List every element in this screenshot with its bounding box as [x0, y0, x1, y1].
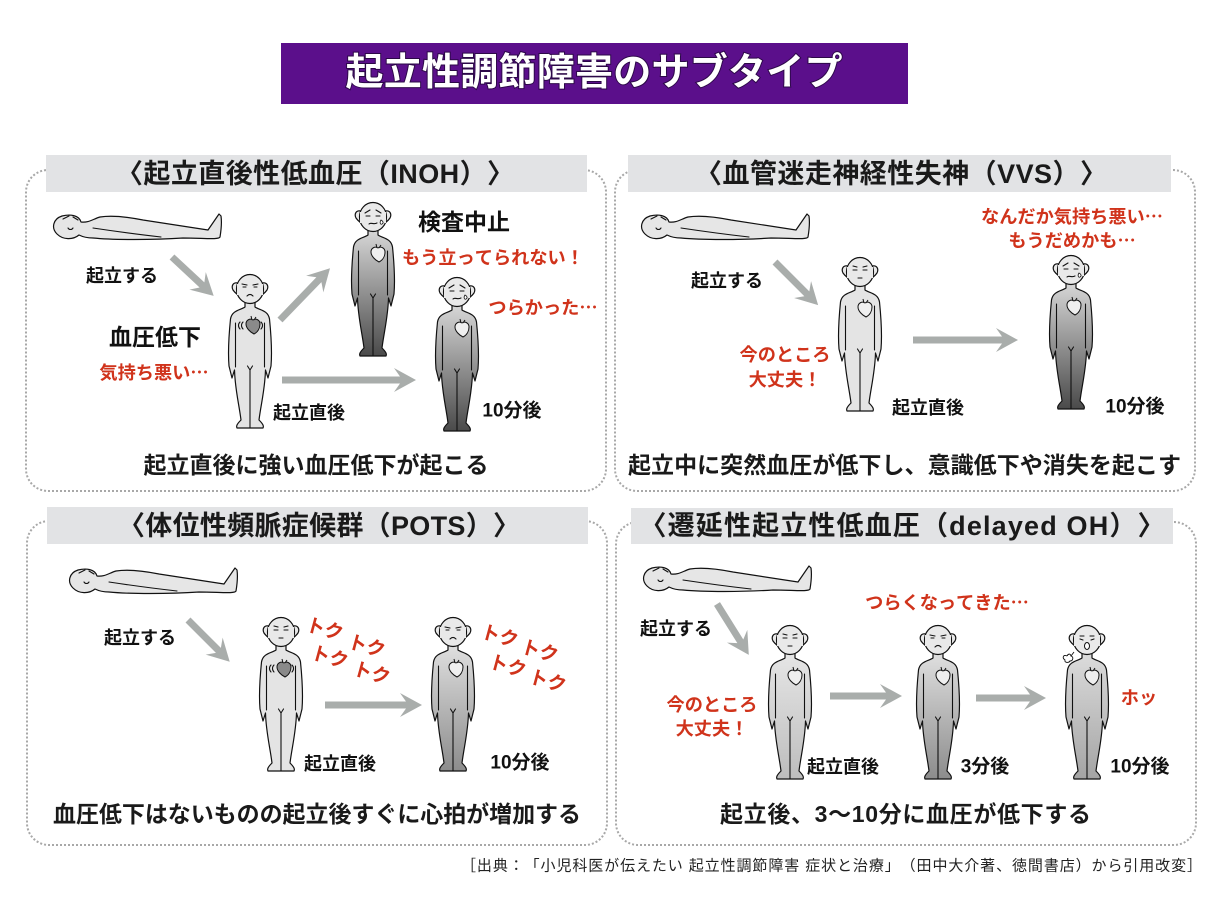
- heartbeat text 2: トク: [486, 647, 530, 683]
- label: blood pressure drop: 血圧低下: [109, 324, 201, 350]
- panel: POTS: [27, 507, 607, 845]
- arrow to 10 minutes: [913, 328, 1018, 352]
- speech: ok so far: [667, 691, 757, 741]
- lying figure: [644, 566, 811, 592]
- speech: ok so far: [740, 341, 830, 392]
- label: 10 minutes: 10分後: [490, 752, 550, 774]
- speech: ok so far: 大丈夫！: [676, 715, 748, 741]
- label: stand up: 起立する: [640, 619, 712, 639]
- label: 10 minutes: 10分後: [482, 400, 542, 422]
- label: stand up: 起立する: [691, 271, 763, 291]
- label: right after standing: 起立直後: [304, 754, 376, 774]
- summary text: 起立後、3〜10分に血圧が低下する: [720, 801, 1091, 827]
- speech: ok so far: 今のところ: [667, 691, 757, 717]
- panel heading: VVS: [628, 155, 1171, 192]
- figure: 10 minutes later: [1063, 626, 1108, 779]
- panel heading: INOH: [46, 155, 587, 192]
- summary text: 血圧低下はないものの起立後すぐに心拍が増加する: [53, 801, 581, 827]
- summary text: 起立直後に強い血圧低下が起こる: [144, 452, 488, 478]
- panel heading: POTS: 〈体位性頻脈症候群（POTS）〉: [118, 511, 520, 541]
- figure: immediately after standing: [229, 274, 271, 428]
- lying figure: [642, 214, 809, 240]
- panel: VVS: [615, 155, 1195, 491]
- label: 10 minutes: 10分後: [1105, 396, 1165, 418]
- arrow to standing: [164, 248, 222, 305]
- figure: immediately after standing: [839, 258, 881, 411]
- panel heading: VVS: 〈血管迷走神経性失神（VVS）〉: [695, 159, 1107, 189]
- speech: ok so far: 大丈夫！: [749, 366, 821, 392]
- source citation: ［出典：「小児科医が伝えたい 起立性調節障害 症状と治療」（田中大介著、徳間書店）から引用改変］: [461, 858, 1202, 874]
- arrow to 10 minutes: [976, 686, 1046, 710]
- label: stand up: 起立する: [104, 628, 176, 648]
- speech: ok so far: 今のところ: [740, 341, 830, 367]
- heartbeat text 1: [303, 610, 394, 690]
- speech: relief: ホッ: [1121, 684, 1157, 710]
- panel heading: delayed OH: 〈遷延性起立性低血圧（delayed OH）〉: [640, 511, 1164, 541]
- arrow to 10 minutes: [325, 693, 422, 717]
- arrow to standing: [767, 254, 827, 314]
- speech: feeling sick: なんだか気持ち悪い…: [981, 203, 1163, 229]
- speech: getting harder: つらくなってきた…: [865, 589, 1029, 615]
- panel: delayed OH: [616, 508, 1196, 845]
- figure: 3 minutes later: [917, 626, 959, 779]
- figure: 10 minutes later: [436, 278, 478, 431]
- figure: 10 minutes later: [432, 618, 474, 771]
- arrow to standing: [180, 612, 238, 670]
- heartbeat text 2: トク: [518, 632, 562, 668]
- arrow up to test stopped: [271, 260, 339, 328]
- title banner: [281, 43, 908, 104]
- figure: immediately after standing: [260, 618, 302, 771]
- figure: test stopped: [352, 202, 394, 356]
- heartbeat text 1: トク: [308, 638, 352, 674]
- heartbeat text 2: トク: [478, 617, 522, 653]
- heartbeat text 2: トク: [526, 662, 570, 698]
- speech: feeling sick: 気持ち悪い…: [99, 359, 209, 385]
- speech: feeling sick: もうだめかも…: [1008, 227, 1136, 253]
- speech: feeling sick: [981, 203, 1163, 253]
- panel: INOH: [26, 155, 606, 491]
- heartbeat text 1: トク: [350, 654, 394, 690]
- panel heading: INOH: 〈起立直後性低血圧（INOH）〉: [116, 159, 514, 189]
- label: right after standing: 起立直後: [892, 398, 964, 418]
- heartbeat text 1: トク: [303, 610, 347, 646]
- lying figure: [70, 568, 237, 594]
- figure: 10 minutes later: [1050, 256, 1092, 409]
- label: right after standing: 起立直後: [273, 403, 345, 423]
- title banner: 起立性調節障害のサブタイプ: [346, 51, 842, 94]
- label: 10 minutes: 10分後: [1110, 756, 1170, 778]
- heartbeat text 2: [478, 617, 570, 698]
- figure: immediately after standing: [769, 626, 811, 779]
- summary text: 起立中に突然血圧が低下し、意識低下や消失を起こす: [628, 452, 1181, 478]
- label: test stopped: 検査中止: [418, 209, 510, 235]
- lying figure: [54, 214, 221, 240]
- arrow to 3 minutes: [830, 684, 902, 708]
- arrow to 10 minutes: [282, 368, 416, 392]
- arrow to standing: [707, 598, 759, 661]
- panel heading: POTS: [47, 507, 588, 544]
- label: 3 minutes: 3分後: [961, 756, 1009, 778]
- speech: it was hard: つらかった…: [488, 294, 598, 320]
- label: right after standing: 起立直後: [807, 757, 879, 777]
- speech: cannot stand: もう立ってられない！: [402, 244, 584, 270]
- heartbeat text 1: トク: [345, 627, 389, 663]
- label: stand up: 起立する: [86, 266, 158, 286]
